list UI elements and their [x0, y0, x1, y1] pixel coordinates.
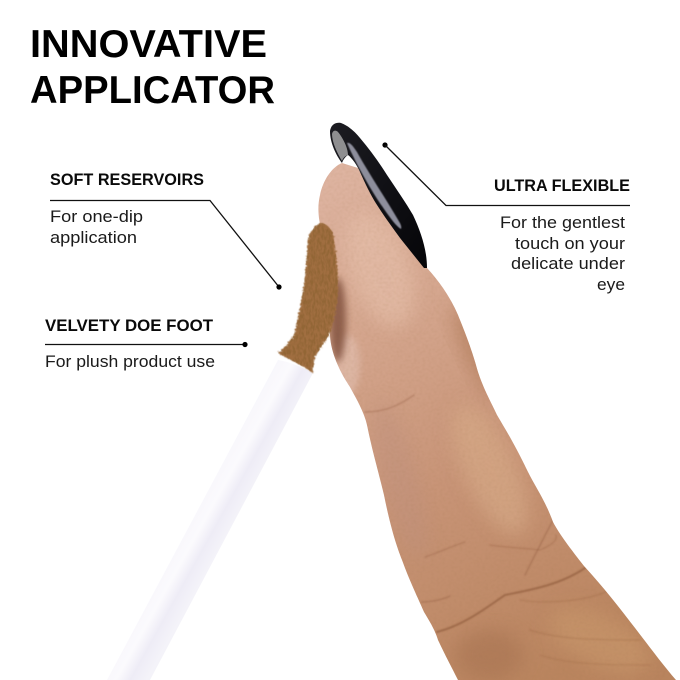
callout: soft reservoirs: application	[50, 229, 137, 247]
applicator stick	[107, 360, 313, 680]
callout: ultra flexible: eye	[597, 276, 625, 294]
title: INNOVATIVE	[30, 23, 267, 66]
callout: ultra flexible	[382, 142, 630, 294]
callout: soft reservoirs	[50, 170, 282, 290]
callout: soft reservoirs: SOFT RESERVOIRS	[50, 170, 204, 189]
callout: ultra flexible: For the gentlest	[500, 214, 625, 232]
title: APPLICATOR	[30, 69, 275, 112]
finger	[300, 150, 680, 680]
knuckle creases	[364, 394, 620, 640]
nail	[330, 123, 427, 268]
callout: ultra flexible: touch on your	[515, 235, 626, 253]
callout: velvety doe foot: VELVETY DOE FOOT	[45, 316, 214, 335]
title	[30, 23, 275, 112]
callout: soft reservoirs: For one-dip	[50, 208, 143, 226]
contact shadow beside brush	[330, 278, 346, 362]
callout: ultra flexible: delicate under	[511, 255, 626, 273]
callout: velvety doe foot	[45, 316, 248, 371]
callout: velvety doe foot: For plush product use	[45, 353, 215, 371]
brush tip: velvety doe foot	[275, 220, 341, 375]
callout: ultra flexible: ULTRA FLEXIBLE	[494, 176, 630, 195]
